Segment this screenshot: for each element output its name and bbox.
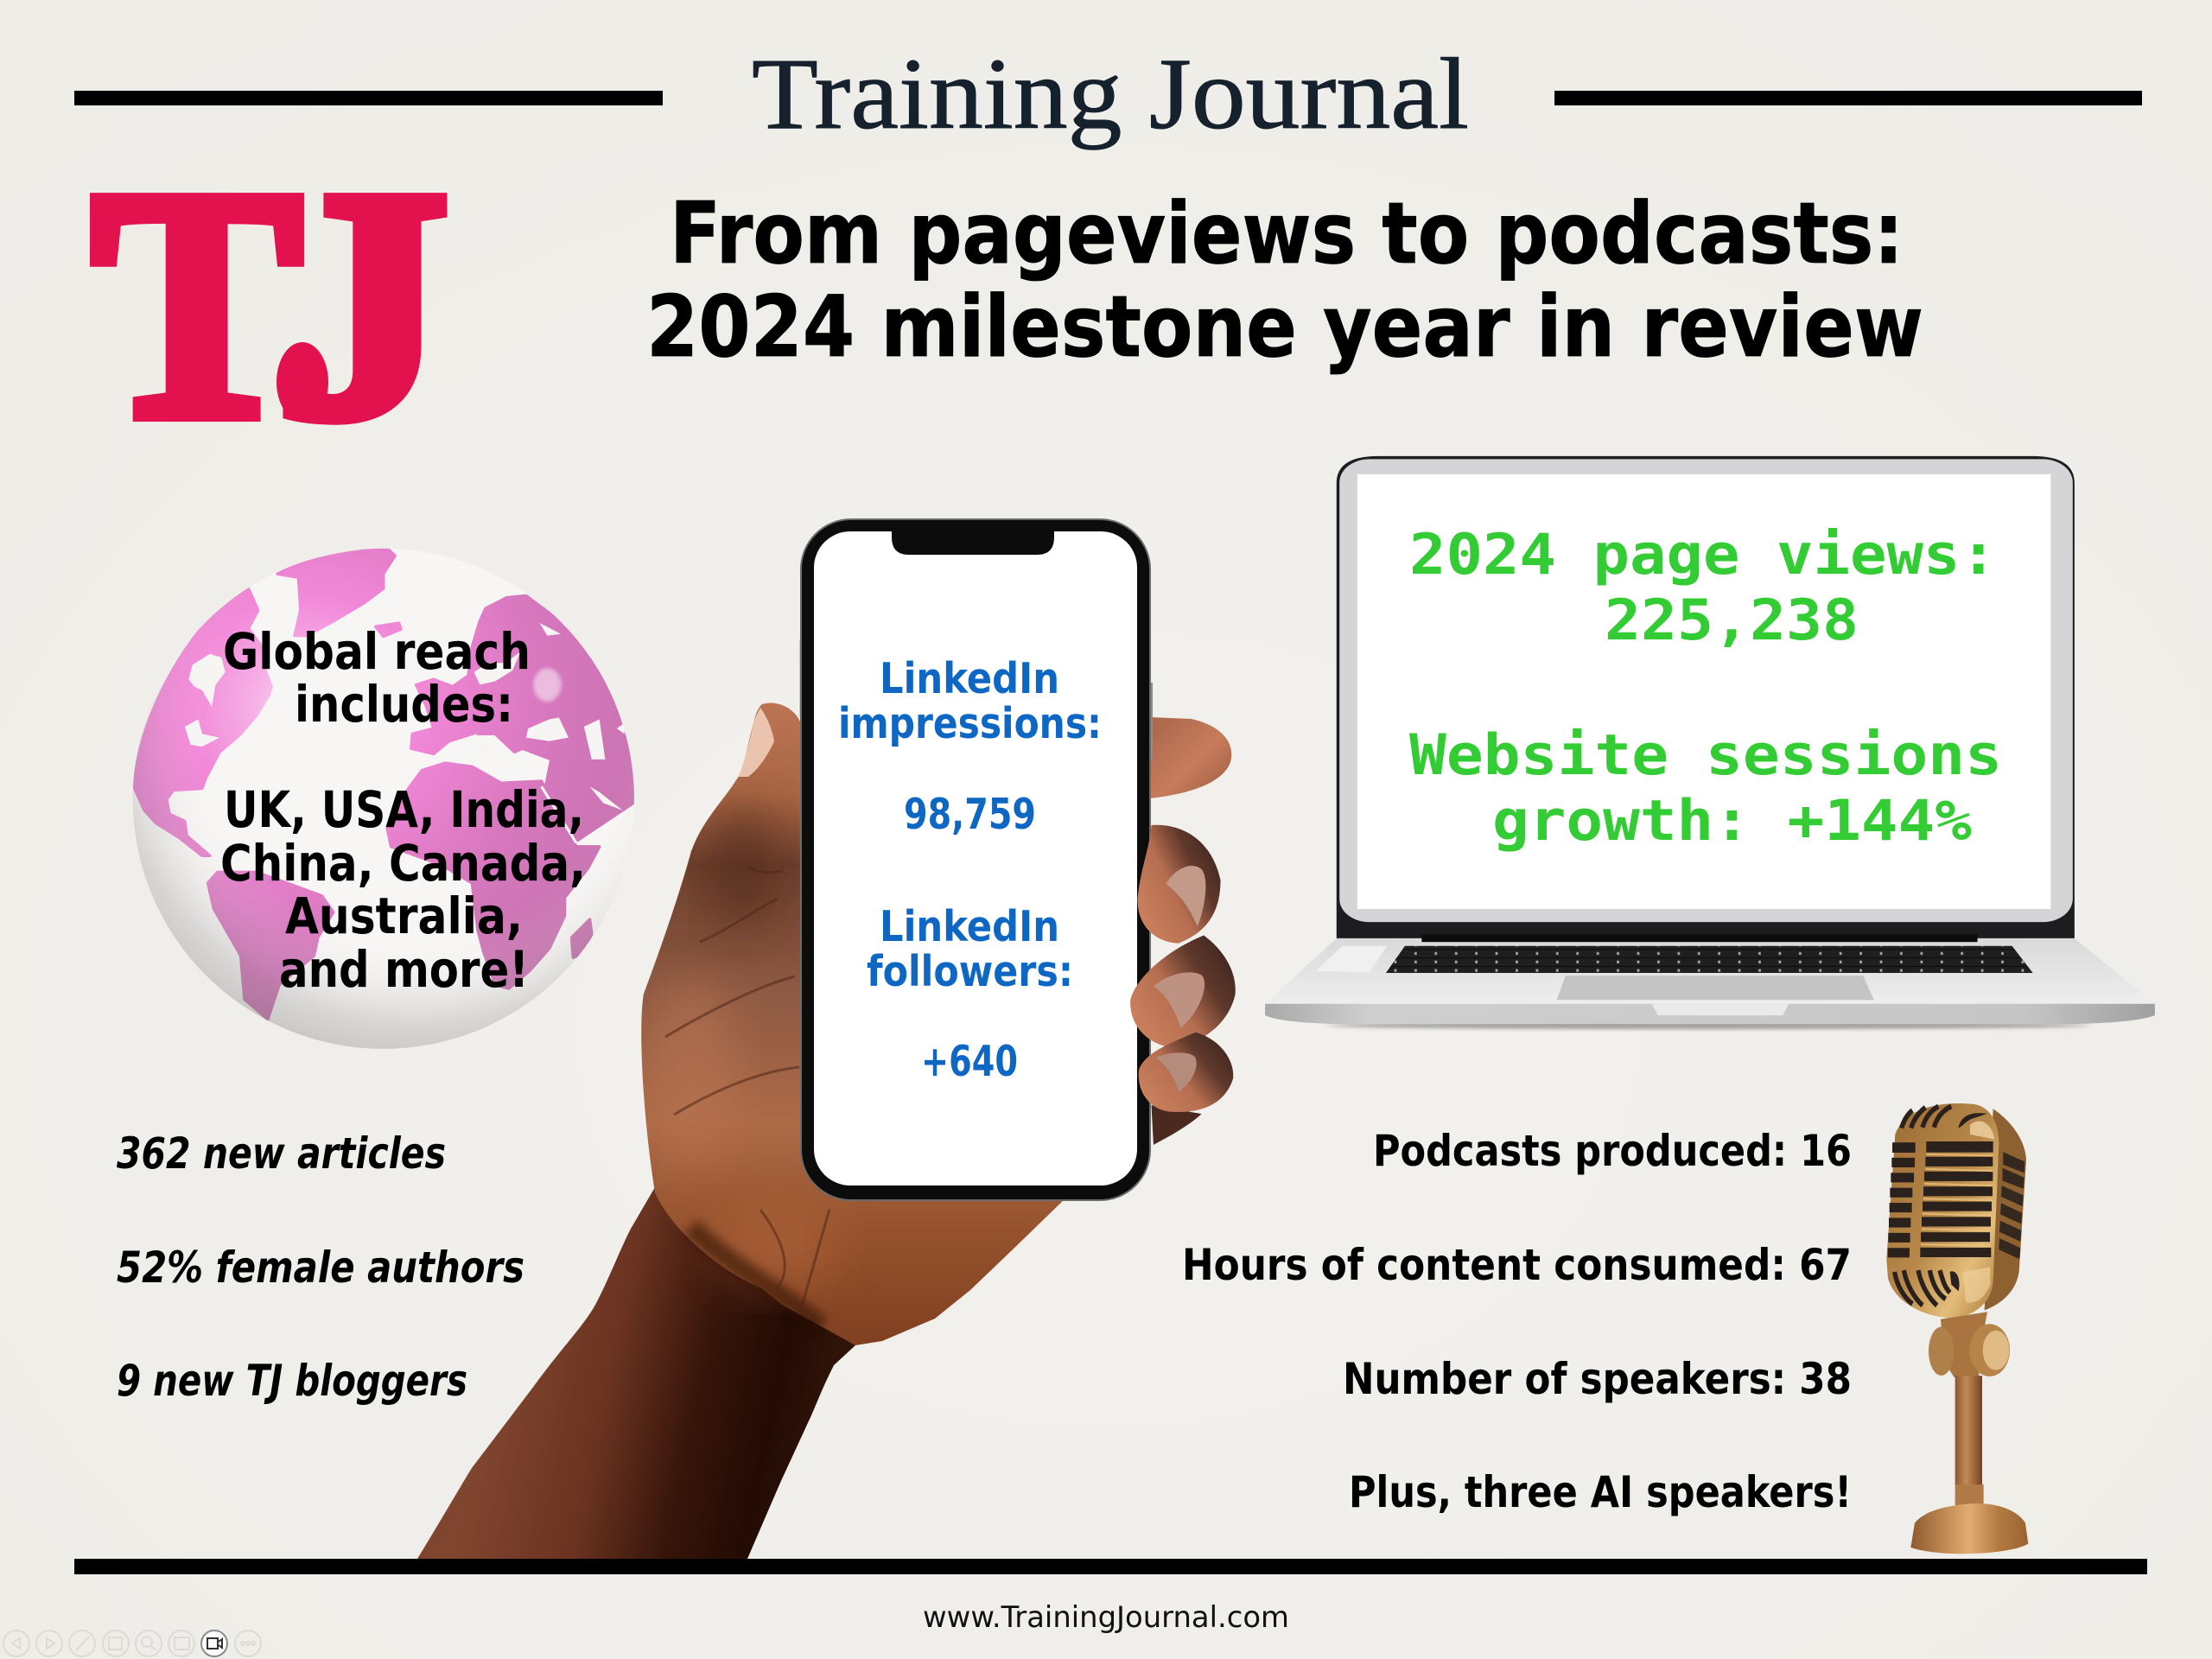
header rule left [74,91,663,105]
globe text: global reach: UK, USA, India, [224,780,584,839]
phone text: LinkedIn stats: +640 [921,1037,1018,1086]
globe text: global reach: Global reach [223,622,531,681]
headline: 2024 milestone year in review [646,278,1923,377]
fingers [1130,825,1236,1145]
footer url: www.TrainingJournal.com [923,1600,1289,1635]
hand holding phone [417,519,1236,1559]
phone text: LinkedIn stats: LinkedIn [880,654,1059,703]
laptop text: page views and sessions: 2024 page views: [1409,523,1997,588]
phone [799,519,1153,1200]
laptop text: page views and sessions: growth: +144% [1492,789,1972,854]
slideshow toolbar icons [3,1630,261,1656]
laptop text: page views and sessions: Website sessions [1409,723,2002,788]
laptop text: page views and sessions [1409,523,2002,854]
laptop [1265,456,2155,1029]
phone text: LinkedIn stats: LinkedIn [880,902,1059,951]
globe illustration [133,549,636,1049]
globe text: global reach [220,622,586,999]
globe text: global reach: China, Canada, [220,834,586,893]
phone text: LinkedIn stats: followers: [867,947,1073,996]
title: Training Journal: Training Journal [752,37,1469,150]
podcast stats list: Podcasts produced: 16 [1373,1126,1852,1176]
phone text: LinkedIn stats [838,654,1102,1086]
logo: TJ [92,123,449,486]
podcast stats list: Hours of content consumed: 67 [1182,1240,1852,1290]
phone text: LinkedIn stats: 98,759 [904,790,1036,839]
left stats list: 362 new articles [117,1128,446,1179]
podcast stats list: Number of speakers: 38 [1343,1354,1852,1404]
forearm and palm [417,703,1071,1559]
logo: TJ: J [275,123,449,486]
left stats list [117,1128,524,1406]
footer rule [74,1559,2147,1574]
headline: From pageviews to podcasts: [670,185,1904,283]
left stats list: 9 new TJ bloggers [117,1356,467,1406]
left stats list: 52% female authors [117,1243,524,1293]
phone notch [892,531,1054,555]
logo: TJ: T [92,123,302,486]
icon: gold microphone [1886,1103,2028,1554]
headline [646,185,1923,377]
thumb nail [738,708,774,777]
globe panel [133,549,636,1049]
laptop text: page views and sessions: 225,238 [1605,588,1859,653]
podcast stats list: Plus, three AI speakers! [1349,1467,1852,1517]
header rule right [1554,91,2142,105]
globe text: global reach: and more! [279,940,529,999]
index finger [1149,717,1231,798]
globe text: global reach: includes: [295,675,513,734]
phone text: LinkedIn stats: impressions: [838,699,1102,748]
podcast stats list [1182,1126,1852,1517]
laptop illustration [1265,456,2155,1029]
globe text: global reach: Australia, [285,887,523,945]
